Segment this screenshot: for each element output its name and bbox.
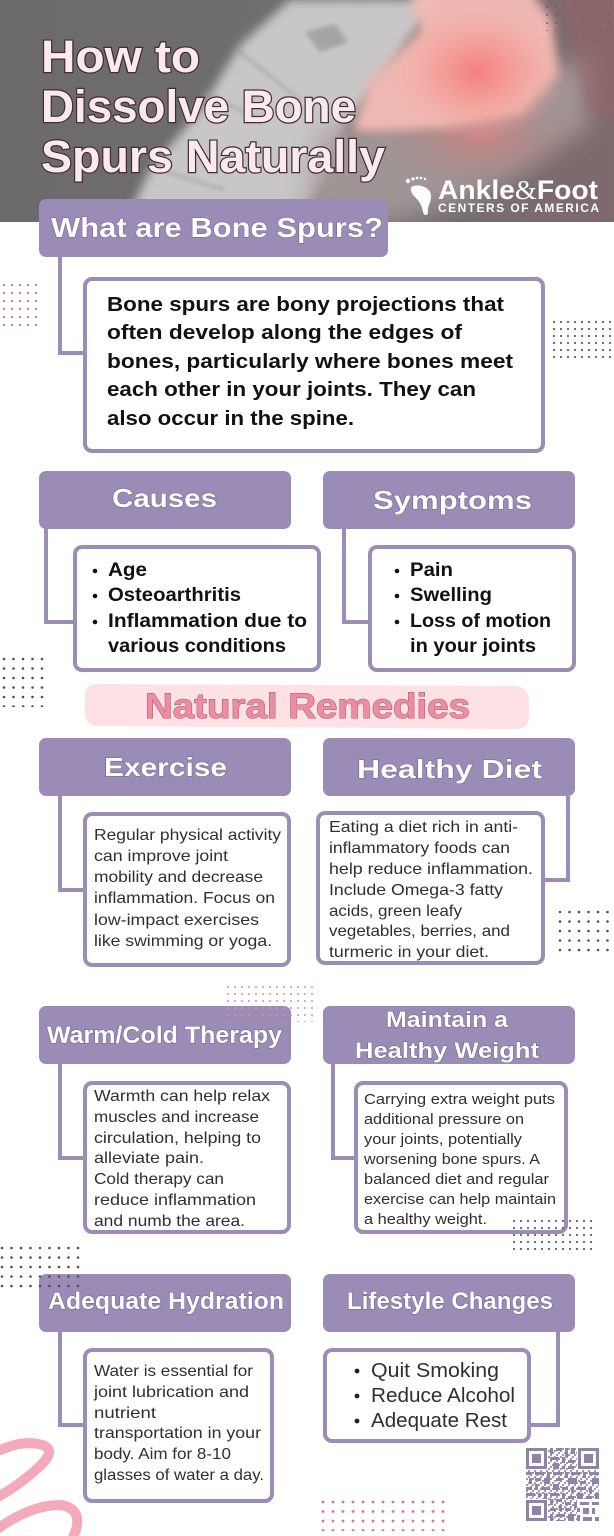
text block: definition: often develop along the edges of — [107, 322, 462, 344]
text block: diet: inflammatory foods can — [329, 840, 510, 857]
text block: diet: Eating a diet rich in anti- — [329, 819, 518, 836]
heading: Healthy Diet: Healthy Diet — [357, 754, 542, 784]
logo: Ankle and Foot Centers of America: CENTERS OF AMERICA — [438, 201, 599, 215]
panel: Warm/Cold Therapy — [39, 1006, 291, 1232]
panel: What are Bone Spurs — [39, 199, 543, 451]
icon: footprint — [406, 177, 431, 215]
text block: weight: exercise can help maintain — [364, 1191, 556, 1208]
heading: Warm/Cold Therapy: Warm/Cold Therapy — [47, 1022, 283, 1049]
text block: hydration: joint lubrication and — [93, 1384, 249, 1401]
decorative pink scribble — [0, 1443, 77, 1536]
text block: weight: balanced diet and regular — [364, 1171, 549, 1188]
text block: warm and cold: circulation, helping to — [94, 1130, 261, 1147]
heading: Adequate Hydration: Adequate Hydration — [48, 1288, 284, 1315]
panel: Causes — [39, 471, 319, 670]
list: causes — [75, 547, 319, 670]
text block: exercise: inflammation. Focus on — [94, 890, 275, 907]
text block: warm and cold: alleviate pain. — [94, 1150, 204, 1167]
heading: Exercise — [39, 738, 291, 796]
list: lifestyle: Adequate Rest — [371, 1410, 507, 1432]
text block: exercise: low-impact exercises — [94, 912, 259, 929]
text block: definition: also occur in the spine. — [107, 408, 354, 430]
title — [41, 31, 385, 182]
text block: diet: help reduce inflammation. — [329, 861, 533, 878]
heading: What are Bone Spurs: What are Bone Spurs? — [51, 212, 383, 243]
heading: Natural Remedies: Natural Remedies — [145, 687, 470, 726]
list: lifestyle: Quit Smoking — [371, 1360, 499, 1382]
title: Dissolve Bone — [41, 81, 356, 132]
list: causes: various conditions — [108, 636, 286, 657]
text block: definition — [85, 279, 543, 451]
list: symptoms: Swelling — [410, 585, 492, 606]
text block: hydration: glasses of water a day. — [94, 1467, 264, 1484]
text block: diet: acids, green leafy — [329, 903, 462, 920]
heading: Maintain a Healthy Weight: Healthy Weight — [355, 1038, 540, 1063]
text block: hydration: Water is essential for — [94, 1363, 254, 1380]
panel: Maintain a Healthy Weight — [323, 1006, 575, 1232]
text block: exercise: like swimming or yoga. — [94, 933, 272, 950]
panel: Adequate Hydration — [39, 1274, 291, 1501]
text block: weight — [356, 1083, 566, 1232]
panel: Healthy Diet — [318, 738, 575, 963]
text block: definition: each other in your joints. They can — [107, 379, 476, 401]
text block: warm and cold: Cold therapy can — [94, 1171, 224, 1188]
panel: Lifestyle Changes — [323, 1274, 575, 1441]
panel: Exercise — [39, 738, 291, 965]
text block: hydration: transportation in your — [94, 1425, 262, 1442]
heading: Lifestyle Changes — [323, 1274, 575, 1332]
text block: warm and cold: muscles and increase — [94, 1109, 259, 1126]
text block: exercise: mobility and decrease — [94, 869, 263, 886]
dot pattern on header — [545, 5, 614, 31]
list: lifestyle: Reduce Alcohol — [371, 1385, 515, 1407]
title: Spurs Naturally — [41, 131, 385, 182]
text block: weight: a healthy weight. — [364, 1211, 487, 1228]
list: symptoms: Loss of motion — [410, 611, 551, 632]
logo: Ankle and Foot Centers of America: Ankle&Foot — [438, 175, 598, 205]
list: causes: Osteoarthritis — [108, 585, 241, 606]
text block: weight: worsening bone spurs. A — [363, 1151, 540, 1168]
text block: warm and cold: and numb the area. — [94, 1213, 245, 1230]
text block: hydration: nutrient — [94, 1405, 157, 1422]
text block: warm and cold: reduce inflammation — [94, 1192, 256, 1209]
list: causes: Inflammation due to — [108, 611, 307, 632]
heading: Healthy Diet — [323, 738, 575, 796]
text block: definition: Bone spurs are bony projections that — [107, 294, 504, 316]
heading: Symptoms: Symptoms — [373, 485, 532, 515]
heading: Warm/Cold Therapy — [39, 1006, 291, 1064]
list: symptoms: Pain — [410, 560, 453, 581]
text block: diet: Include Omega-3 fatty — [329, 882, 503, 899]
heading: Natural Remedies — [85, 684, 529, 729]
heading: Lifestyle Changes: Lifestyle Changes — [347, 1288, 553, 1315]
heading: Symptoms — [323, 471, 575, 529]
heading: Causes: Causes — [112, 483, 217, 513]
text block: weight: Carrying extra weight puts — [364, 1091, 555, 1108]
logo: Ankle and Foot Centers of America — [406, 175, 599, 215]
text block: weight: your joints, potentially — [364, 1131, 523, 1148]
text block: exercise — [85, 814, 289, 965]
text block: hydration — [85, 1350, 272, 1501]
text block: warm and cold: Warmth can help relax — [94, 1088, 270, 1105]
text block: diet: vegetables, berries, and — [329, 923, 510, 940]
text block: exercise: Regular physical activity — [94, 827, 281, 844]
text block: diet — [318, 813, 543, 963]
panel: Symptoms — [323, 471, 575, 670]
text block: warm and cold — [85, 1083, 289, 1232]
text block: diet: turmeric in your diet. — [329, 944, 489, 961]
text block: definition: bones, particularly where bones meet — [107, 351, 513, 373]
QR code — [526, 1448, 599, 1521]
heading: Exercise: Exercise — [104, 752, 227, 782]
text block: weight: additional pressure on — [364, 1111, 524, 1128]
list: lifestyle — [325, 1350, 529, 1441]
heading: Maintain a Healthy Weight — [323, 1006, 575, 1064]
title: How to — [41, 31, 200, 82]
heading: Causes — [39, 471, 291, 529]
text block: hydration: body. Aim for 8-10 — [94, 1446, 231, 1463]
heading: Adequate Hydration — [39, 1274, 291, 1332]
list: symptoms — [370, 547, 574, 670]
list: causes: Age — [108, 560, 147, 581]
heading: Maintain a Healthy Weight: Maintain a — [386, 1007, 509, 1032]
header x-ray photo — [0, 0, 614, 222]
heading: What are Bone Spurs — [39, 199, 388, 257]
list: symptoms: in your joints — [410, 636, 536, 657]
text block: exercise: can improve joint — [94, 848, 229, 865]
